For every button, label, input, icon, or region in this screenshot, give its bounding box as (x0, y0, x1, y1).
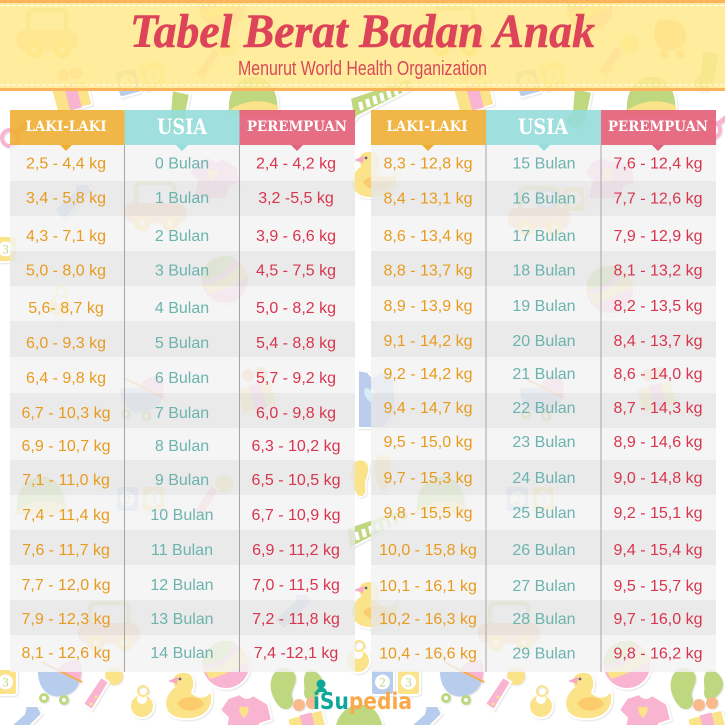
column: perempuan weights (614, 156, 702, 662)
icon: car, table right (508, 188, 570, 236)
column: perempuan weights: 7,6 - 12,4 kg (614, 156, 702, 172)
column: perempuan weights: 7,7 - 12,6 kg (614, 190, 702, 208)
column: perempuan weights: 9,5 - 15,7 kg (614, 578, 702, 595)
column: usia months: 24 Bulan (512, 470, 576, 487)
column: usia months: 18 Bulan (512, 262, 576, 280)
icon: blocks, table right (536, 186, 585, 212)
icon: rattle, table (193, 475, 233, 518)
icon: gift, top right (453, 67, 495, 114)
column: usia months: 14 Bulan (150, 645, 214, 662)
icon: car, lower right (478, 603, 540, 651)
icon: duck, center (351, 151, 398, 198)
icon: stroller, bottom right (440, 660, 484, 705)
header: perempuan: PEREMPUAN (608, 119, 708, 135)
icon: sock, center (566, 88, 592, 129)
icon: bottle, left (54, 184, 92, 220)
row bands (371, 145, 716, 672)
column: laki-laki weights: 7,7 - 12,0 kg (22, 577, 110, 594)
column: perempuan weights: 3,2 -5,5 kg (258, 190, 334, 207)
column: usia months: 1 Bulan (155, 190, 209, 207)
column: perempuan weights: 6,3 - 10,2 kg (252, 438, 340, 455)
icon: ball, table right (586, 266, 634, 314)
column: usia months: 9 Bulan (155, 472, 209, 489)
icon: hat, bottom center (333, 704, 384, 725)
header: usia (124, 110, 240, 151)
column: usia months: 19 Bulan (512, 298, 576, 315)
column: laki-laki weights: 9,1 - 14,2 kg (384, 333, 472, 350)
column: laki-laki weights: 9,5 - 15,0 kg (384, 434, 472, 451)
column: perempuan weights: 7,9 - 12,9 kg (614, 228, 702, 245)
icon: rattle, bottom right (485, 667, 525, 710)
column: perempuan weights: 2,4 - 4,2 kg (256, 156, 336, 172)
column: usia months: 2 Bulan (155, 228, 209, 245)
icon: hat, left (227, 76, 278, 114)
icon: gift, bottom left (287, 697, 329, 725)
icon: duck, bottom right (565, 672, 612, 719)
column: perempuan weights: 8,1 - 13,2 kg (614, 262, 702, 280)
icon: number blocks, top left (113, 60, 167, 98)
icon: hat, right (625, 76, 676, 114)
column: usia months: 13 Bulan (150, 611, 214, 628)
header: perempuan (601, 110, 716, 151)
banner (0, 0, 725, 91)
column: usia months: 27 Bulan (512, 578, 576, 595)
icon: toy car, top left (16, 10, 78, 58)
icon: rattle, top (195, 37, 235, 80)
icon: ball, table (201, 256, 249, 304)
icon: crib, center top (350, 78, 414, 122)
icon: duck, center lower (351, 581, 398, 628)
column: laki-laki weights: 8,8 - 13,7 kg (384, 262, 472, 280)
column: perempuan weights: 6,9 - 11,2 kg (252, 542, 340, 559)
icon: hat, table right (415, 476, 466, 514)
column: usia months: 20 Bulan (512, 333, 576, 350)
column: perempuan weights: 3,9 - 6,6 kg (256, 228, 336, 245)
column: usia months: 7 Bulan (155, 405, 209, 422)
column: usia months: 21 Bulan (512, 366, 576, 383)
column: perempuan weights: 5,0 - 8,2 kg (256, 300, 336, 317)
column: usia months: 16 Bulan (512, 190, 576, 208)
logo: iSupedia: iSupedia (313, 689, 412, 715)
column: laki-laki weights: 9,4 - 14,7 kg (384, 400, 472, 417)
icon: crib, center (346, 508, 410, 552)
column: laki-laki weights: 5,0 - 8,0 kg (26, 262, 106, 280)
header: perempuan (240, 110, 355, 151)
icon: rattle, top right (598, 35, 638, 78)
column: usia months: 10 Bulan (150, 507, 214, 524)
icon: ball, bottom left (202, 641, 250, 689)
column: laki-laki weights (22, 156, 110, 662)
column: laki-laki weights: 5,6- 8,7 kg (28, 300, 104, 317)
column: laki-laki weights: 6,4 - 9,8 kg (26, 370, 106, 387)
header: usia: USIA (518, 114, 569, 139)
icon: bottle, bottom left corner (4, 706, 42, 725)
icon: onesie, table (189, 157, 241, 199)
column: usia months: 23 Bulan (512, 434, 576, 451)
column: laki-laki weights: 6,9 - 10,7 kg (22, 438, 110, 455)
column: laki-laki weights (379, 156, 477, 662)
logo: iSupedia (313, 680, 412, 715)
column: laki-laki weights: 8,1 - 12,6 kg (22, 645, 110, 662)
icon: pacifier, left edge (2, 119, 31, 146)
column: perempuan weights: 9,4 - 15,4 kg (614, 542, 702, 559)
column: usia months: 3 Bulan (155, 262, 209, 280)
column: perempuan weights: 5,7 - 9,2 kg (256, 370, 336, 387)
subtitle: Menurut World Health Organization (238, 58, 487, 80)
column: usia months: 6 Bulan (155, 370, 209, 387)
icon: stroller, table right (520, 376, 564, 421)
column: laki-laki weights: 9,2 - 14,2 kg (384, 366, 472, 383)
column: laki-laki weights: 2,5 - 4,4 kg (26, 156, 106, 172)
row bands (10, 145, 355, 672)
column: perempuan weights: 6,7 - 10,9 kg (252, 507, 340, 524)
column: usia months: 12 Bulan (150, 577, 214, 594)
icon: ball, top (198, 0, 246, 30)
icon: sock, left (164, 90, 190, 131)
icon: small rattle, center bottom (346, 641, 370, 673)
column: laki-laki weights: 8,6 - 13,4 kg (384, 228, 472, 245)
column: perempuan weights: 8,9 - 14,6 kg (614, 434, 702, 451)
column: perempuan weights: 8,2 - 13,5 kg (614, 298, 702, 315)
column: laki-laki weights: 6,0 - 9,3 kg (26, 335, 106, 352)
icon: onesie, bottom left (220, 694, 272, 725)
header: laki-laki: LAKI-LAKI (386, 119, 468, 135)
column: perempuan weights: 9,7 - 16,0 kg (614, 611, 702, 628)
icon: sock, far right (694, 50, 720, 91)
column: usia months: 26 Bulan (512, 542, 576, 559)
icon: ball, bottom right (603, 641, 651, 689)
column: usia months: 22 Bulan (512, 400, 576, 417)
column: perempuan weights: 7,0 - 11,5 kg (252, 577, 340, 594)
panel: table 0-14 months (10, 110, 355, 672)
icon: bottle, bottom center (404, 706, 442, 725)
icon: onesie, blue (358, 370, 396, 428)
column: perempuan weights: 4,5 - 7,5 kg (256, 262, 336, 280)
column: laki-laki weights: 7,6 - 11,7 kg (22, 542, 110, 559)
icon: blocks, bottom left edge (0, 669, 17, 695)
column: laki-laki weights: 7,9 - 12,3 kg (22, 611, 110, 628)
icon: onesie, bottom right (619, 694, 671, 725)
icon: blocks, lower right (506, 486, 555, 512)
column: perempuan weights: 9,8 - 16,2 kg (614, 646, 702, 662)
column: laki-laki weights: 8,3 - 12,8 kg (384, 156, 472, 172)
column: perempuan weights: 8,4 - 13,7 kg (614, 333, 702, 350)
icon: toy car, table left (124, 183, 186, 231)
column: laki-laki weights: 8,9 - 13,9 kg (384, 298, 472, 315)
column: laki-laki weights: 10,0 - 15,8 kg (379, 542, 477, 559)
column: laki-laki weights: 7,1 - 11,0 kg (22, 472, 110, 489)
column: perempuan weights: 7,2 - 11,8 kg (252, 611, 340, 628)
column: perempuan weights: 9,2 - 15,1 kg (614, 505, 702, 522)
header: usia (486, 110, 601, 151)
column: laki-laki weights: 6,7 - 10,3 kg (22, 405, 110, 422)
icon: footprints, bottom left (271, 668, 323, 709)
column: perempuan weights: 6,0 - 9,8 kg (256, 405, 336, 422)
header: usia: USIA (157, 114, 208, 139)
column: usia months (512, 156, 576, 662)
column: usia months: 29 Bulan (512, 646, 576, 662)
header: laki-laki (371, 110, 486, 151)
column: laki-laki weights: 7,4 - 11,4 kg (22, 507, 110, 524)
column: usia months: 4 Bulan (155, 300, 209, 317)
column: usia months: 25 Bulan (512, 505, 576, 522)
header: laki-laki: LAKI-LAKI (26, 119, 106, 135)
panel: table 15-29 months (371, 110, 716, 672)
column: laki-laki weights: 10,2 - 16,3 kg (379, 611, 477, 628)
icon: toy car, top center (423, 8, 485, 56)
icon: stroller, bottom left (38, 660, 82, 705)
icon: onesie, table right (584, 157, 636, 199)
icon: gift, top left (51, 67, 93, 114)
column: usia months (150, 156, 214, 662)
column: usia months: 28 Bulan (512, 611, 576, 628)
column: perempuan weights: 7,4 -12,1 kg (254, 645, 338, 662)
column: perempuan weights: 8,6 - 14,0 kg (614, 366, 702, 383)
column: perempuan weights (252, 156, 340, 662)
header: perempuan: PEREMPUAN (247, 119, 347, 135)
column: perempuan weights: 6,5 - 10,5 kg (252, 472, 340, 489)
column: laki-laki weights: 10,4 - 16,6 kg (379, 646, 477, 662)
column: laki-laki weights: 8,4 - 13,1 kg (384, 190, 472, 208)
column: usia months: 11 Bulan (151, 542, 213, 559)
column: usia months: 15 Bulan (512, 156, 576, 172)
icon: hat, table (15, 476, 66, 514)
icon: gift, bottom right (687, 697, 725, 725)
icon: bib, table (48, 286, 72, 318)
header: laki-laki (10, 110, 124, 151)
column: usia months: 0 Bulan (155, 156, 209, 172)
column: laki-laki weights: 4,3 - 7,1 kg (26, 228, 106, 245)
icon: blocks, bottom center (371, 669, 420, 695)
icon: ball, top right (566, 0, 614, 32)
icon: gift, table right (636, 367, 678, 414)
title: Tabel Berat Badan Anak (130, 5, 595, 58)
icon: blocks, left edge (0, 236, 17, 262)
icon: footprints, bottom right (671, 668, 723, 709)
icon: number blocks, top right (513, 60, 567, 98)
icon: stroller, table (120, 376, 164, 421)
icon: gift, table (236, 367, 278, 414)
icon: blocks, table (116, 486, 165, 512)
column: usia months: 8 Bulan (155, 438, 209, 455)
icon: pacifier, right edge (704, 111, 725, 138)
column: perempuan weights: 8,7 - 14,3 kg (614, 400, 702, 417)
icon: pram, top right (654, 19, 686, 58)
icon: foot (350, 460, 369, 497)
icon: rattle, bottom left (83, 667, 123, 710)
icon: duck, bottom left (165, 672, 212, 719)
column: perempuan weights: 9,0 - 14,8 kg (614, 470, 702, 487)
column: usia months: 17 Bulan (512, 228, 576, 245)
column: usia months: 5 Bulan (155, 335, 209, 352)
icon: feet, faint on right table (373, 454, 392, 491)
icon: bottle, table (274, 594, 312, 630)
column: laki-laki weights: 3,4 - 5,8 kg (26, 190, 106, 207)
column: laki-laki weights: 10,1 - 16,1 kg (379, 578, 477, 595)
column: laki-laki weights: 9,8 - 15,5 kg (384, 505, 472, 522)
icon: bib, bottom left (130, 686, 154, 718)
icon: car, table bottom (78, 603, 140, 651)
column: laki-laki weights: 9,7 - 15,3 kg (384, 470, 472, 487)
icon: bib, bottom right (529, 686, 553, 718)
column: perempuan weights: 5,4 - 8,8 kg (256, 335, 336, 352)
